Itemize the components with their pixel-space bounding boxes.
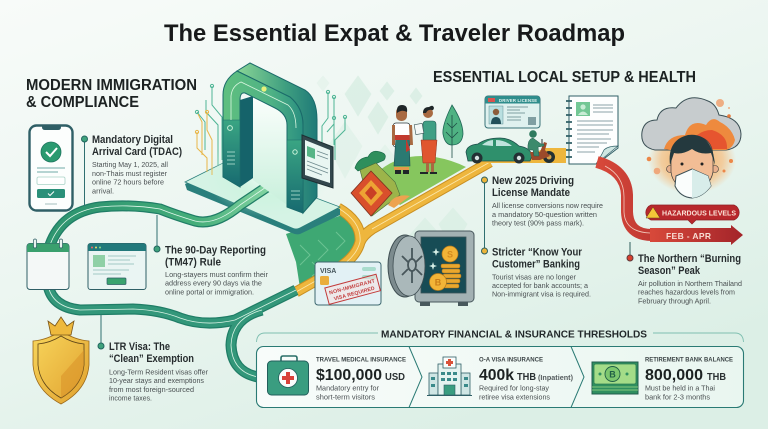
visa card: NON-IMMIGRANT: [329, 278, 376, 296]
item: KYC banking: Stricter “Know Your: [492, 246, 583, 258]
gate platform: [185, 163, 340, 234]
card: travel medical insurance: USD: [385, 372, 405, 383]
card: O-A visa insurance: THB: [517, 372, 536, 383]
card: retirement bank balance: bank for 2-3 months: [645, 394, 711, 402]
hazardous levels pill: HAZARDOUS LEVELS: [662, 210, 736, 218]
item: KYC banking: accepted for bank accounts; a: [492, 283, 588, 290]
item: driving license: a mandatory 50-question written: [492, 212, 597, 219]
item: driving license: License Mandate: [492, 187, 570, 199]
card: retirement bank balance: THB: [707, 372, 726, 383]
card: retirement bank balance: [592, 358, 733, 402]
security gate arch: [223, 63, 317, 213]
card: O-A visa insurance: [427, 357, 573, 402]
bank safe: B: [435, 278, 442, 288]
item: driving license: [482, 175, 603, 248]
card: retirement bank balance: 800,000: [645, 367, 703, 384]
feb-apr arrow: FEB - APR: [666, 231, 711, 241]
card: travel medical insurance: [268, 356, 406, 402]
item: 90-day reporting: address every 90 days via the: [165, 280, 262, 288]
title: The Essential Expat & Traveler Roadmap: [164, 20, 625, 47]
card: O-A visa insurance: O-A VISA INSURANCE: [479, 358, 543, 364]
section heading: immigration: [26, 77, 197, 111]
card: O-A visa insurance: (Inpatient): [538, 375, 573, 382]
item: LTR visa: “Clean” Exemption: [109, 353, 194, 365]
item: TDAC: Starting May 1, 2025, all: [92, 162, 168, 169]
item: driving license: theory test (90% pass mark).: [492, 220, 584, 228]
card: retirement bank balance: RETIREMENT BANK BALANCE: [645, 358, 733, 364]
item: KYC banking: Non-immigrant visa is required.: [492, 292, 591, 298]
driver license card: [485, 96, 540, 128]
item: KYC banking: Tourist visas are no longer: [492, 274, 577, 282]
heading: thresholds: MANDATORY FINANCIAL & INSURANCE THRESHOLDS: [381, 330, 647, 340]
item: TDAC: arrival.: [92, 188, 114, 196]
card: retirement bank balance: B: [609, 370, 616, 380]
people: [392, 105, 437, 174]
item: driving license: All license conversions now require: [492, 203, 603, 210]
item: 90-day reporting: Long-stayers must confirm their: [165, 272, 269, 279]
light glow: [206, 133, 330, 217]
card: O-A visa insurance: retiree visa extensions: [479, 394, 550, 402]
hill: [378, 156, 466, 205]
item: 90-day reporting: (TM47) Rule: [165, 256, 221, 268]
circuit lines: [195, 84, 347, 175]
item: burning season: Air pollution in Northern Thailand: [638, 281, 742, 288]
item: LTR visa: from most foreign-sourced: [109, 387, 194, 394]
thai pattern backdrop: [317, 76, 467, 260]
card: O-A visa insurance: Required for long-stay: [479, 386, 550, 392]
smoke cloud and masked face: [642, 98, 741, 198]
card: travel medical insurance: Mandatory entry for: [316, 386, 380, 392]
item: LTR visa: Long-Term Resident visas offer: [109, 370, 209, 376]
section heading: local setup: ESSENTIAL LOCAL SETUP & HEALTH: [433, 69, 696, 86]
visa card: VISA: [320, 268, 336, 275]
textile bundle: [351, 163, 410, 216]
item: TDAC: Mandatory Digital: [92, 134, 173, 146]
hazardous levels pill: [646, 205, 739, 224]
item: LTR visa: 10-year stays and exemptions: [109, 378, 205, 385]
card: travel medical insurance: short-term visitors: [316, 394, 376, 402]
icon: calendar: [27, 239, 69, 290]
car: [466, 138, 532, 164]
item: TDAC: online 72 hours before: [92, 180, 164, 186]
card: retirement bank balance: Must be held in a Thai: [645, 386, 715, 392]
icon: browser form: [88, 244, 146, 290]
item: 90-day reporting: online portal or immigration.: [165, 290, 254, 296]
driver license card: DRIVER LICENSE: [499, 98, 537, 103]
bank safe: S: [447, 250, 453, 260]
feb-apr arrow: [650, 225, 743, 245]
item: burning season: reaches hazardous levels from: [638, 290, 735, 296]
bush: [355, 151, 385, 171]
card: travel medical insurance: TRAVEL MEDICAL INSURANCE: [316, 358, 406, 364]
item: 90-day reporting: The 90-Day Reporting: [165, 244, 266, 256]
section heading: immigration: MODERN IMMIGRATION: [26, 77, 197, 94]
item: LTR visa: LTR Visa: The: [109, 341, 170, 353]
yellow road: [296, 162, 490, 292]
green patterned field: [286, 214, 362, 288]
lower green road: [48, 285, 296, 377]
tree: [443, 105, 463, 158]
tablet scanner: [302, 135, 333, 188]
icon: phone: [30, 125, 72, 210]
item: 90-day reporting: [154, 215, 269, 296]
card: travel medical insurance: $100,000: [316, 367, 382, 384]
heading: thresholds: [256, 330, 744, 342]
section heading: immigration: & COMPLIANCE: [26, 94, 139, 111]
item: burning season: Season” Peak: [638, 265, 701, 277]
item: TDAC: non-Thais must register: [92, 171, 168, 178]
item: burning season: The Northern “Burning: [638, 253, 741, 265]
visa card: [315, 262, 381, 305]
item: driving license: New 2025 Driving: [492, 175, 574, 187]
item: TDAC: Arrival Card (TDAC): [92, 146, 182, 158]
item: KYC banking: [482, 246, 591, 298]
card: O-A visa insurance: 400k: [479, 367, 514, 384]
item: KYC banking: Customer” Banking: [492, 258, 580, 270]
item: burning season: [627, 242, 742, 306]
visa card: VISA REQUIRED: [333, 286, 376, 302]
document: [566, 96, 618, 164]
item: TDAC: [82, 134, 182, 206]
icon: gold shield with crown: [33, 317, 89, 404]
bank safe: [388, 231, 474, 306]
red road: [597, 162, 715, 235]
item: LTR visa: income taxes.: [109, 396, 152, 402]
item: burning season: February through April.: [638, 298, 711, 306]
upper green road: [50, 181, 276, 245]
item: LTR visa: [98, 315, 209, 402]
motorbike: [528, 130, 555, 163]
yellow platform strip: [480, 148, 566, 163]
panel: thresholds: [256, 346, 744, 408]
